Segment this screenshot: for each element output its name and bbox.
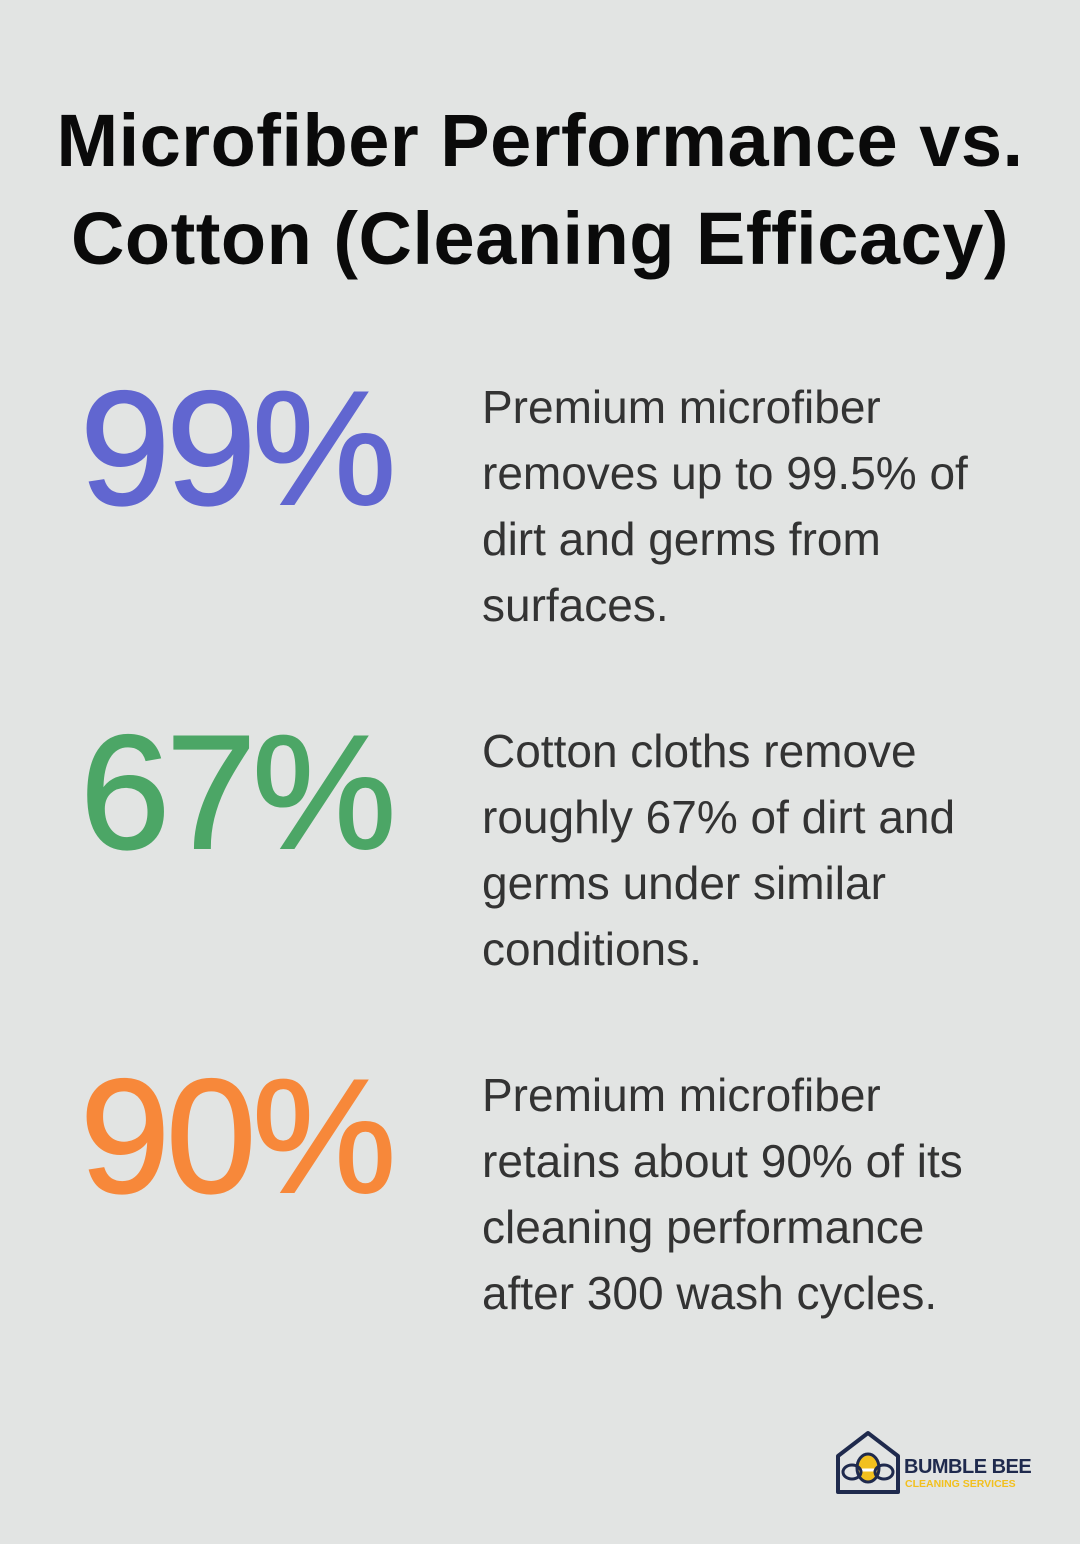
stat 1 number: 99%	[80, 358, 392, 539]
stat 3 text: retains about 90% of its	[482, 1135, 963, 1187]
title	[56, 99, 1024, 280]
stat 3 text: Premium microfiber	[482, 1069, 881, 1121]
stat 1 text: surfaces.	[482, 579, 669, 631]
icon: bee house	[836, 1431, 900, 1494]
stat 3 text	[482, 1069, 963, 1319]
title: Microfiber Performance vs.	[56, 99, 1024, 182]
stat 2 text: conditions.	[482, 923, 702, 975]
brand name: BUMBLE BEE	[904, 1456, 1031, 1478]
stat 1 text: dirt and germs from	[482, 513, 881, 565]
stat 1 text: removes up to 99.5% of	[482, 447, 968, 499]
stat 3 text: cleaning performance	[482, 1201, 924, 1253]
stat 1 text: Premium microfiber	[482, 381, 881, 433]
stat 3 number: 90%	[80, 1046, 392, 1227]
logo	[836, 1431, 1031, 1494]
stat 2 text	[482, 725, 955, 975]
title: Cotton (Cleaning Efficacy)	[71, 197, 1009, 280]
stat 2 text: germs under similar	[482, 857, 886, 909]
brand subtitle: CLEANING SERVICES	[905, 1478, 1016, 1490]
stat 3 text: after 300 wash cycles.	[482, 1267, 937, 1319]
stat 2 number: 67%	[80, 702, 392, 883]
stat 2 text: roughly 67% of dirt and	[482, 791, 955, 843]
stat 2 text: Cotton cloths remove	[482, 725, 917, 777]
stat 1 text	[482, 381, 968, 631]
